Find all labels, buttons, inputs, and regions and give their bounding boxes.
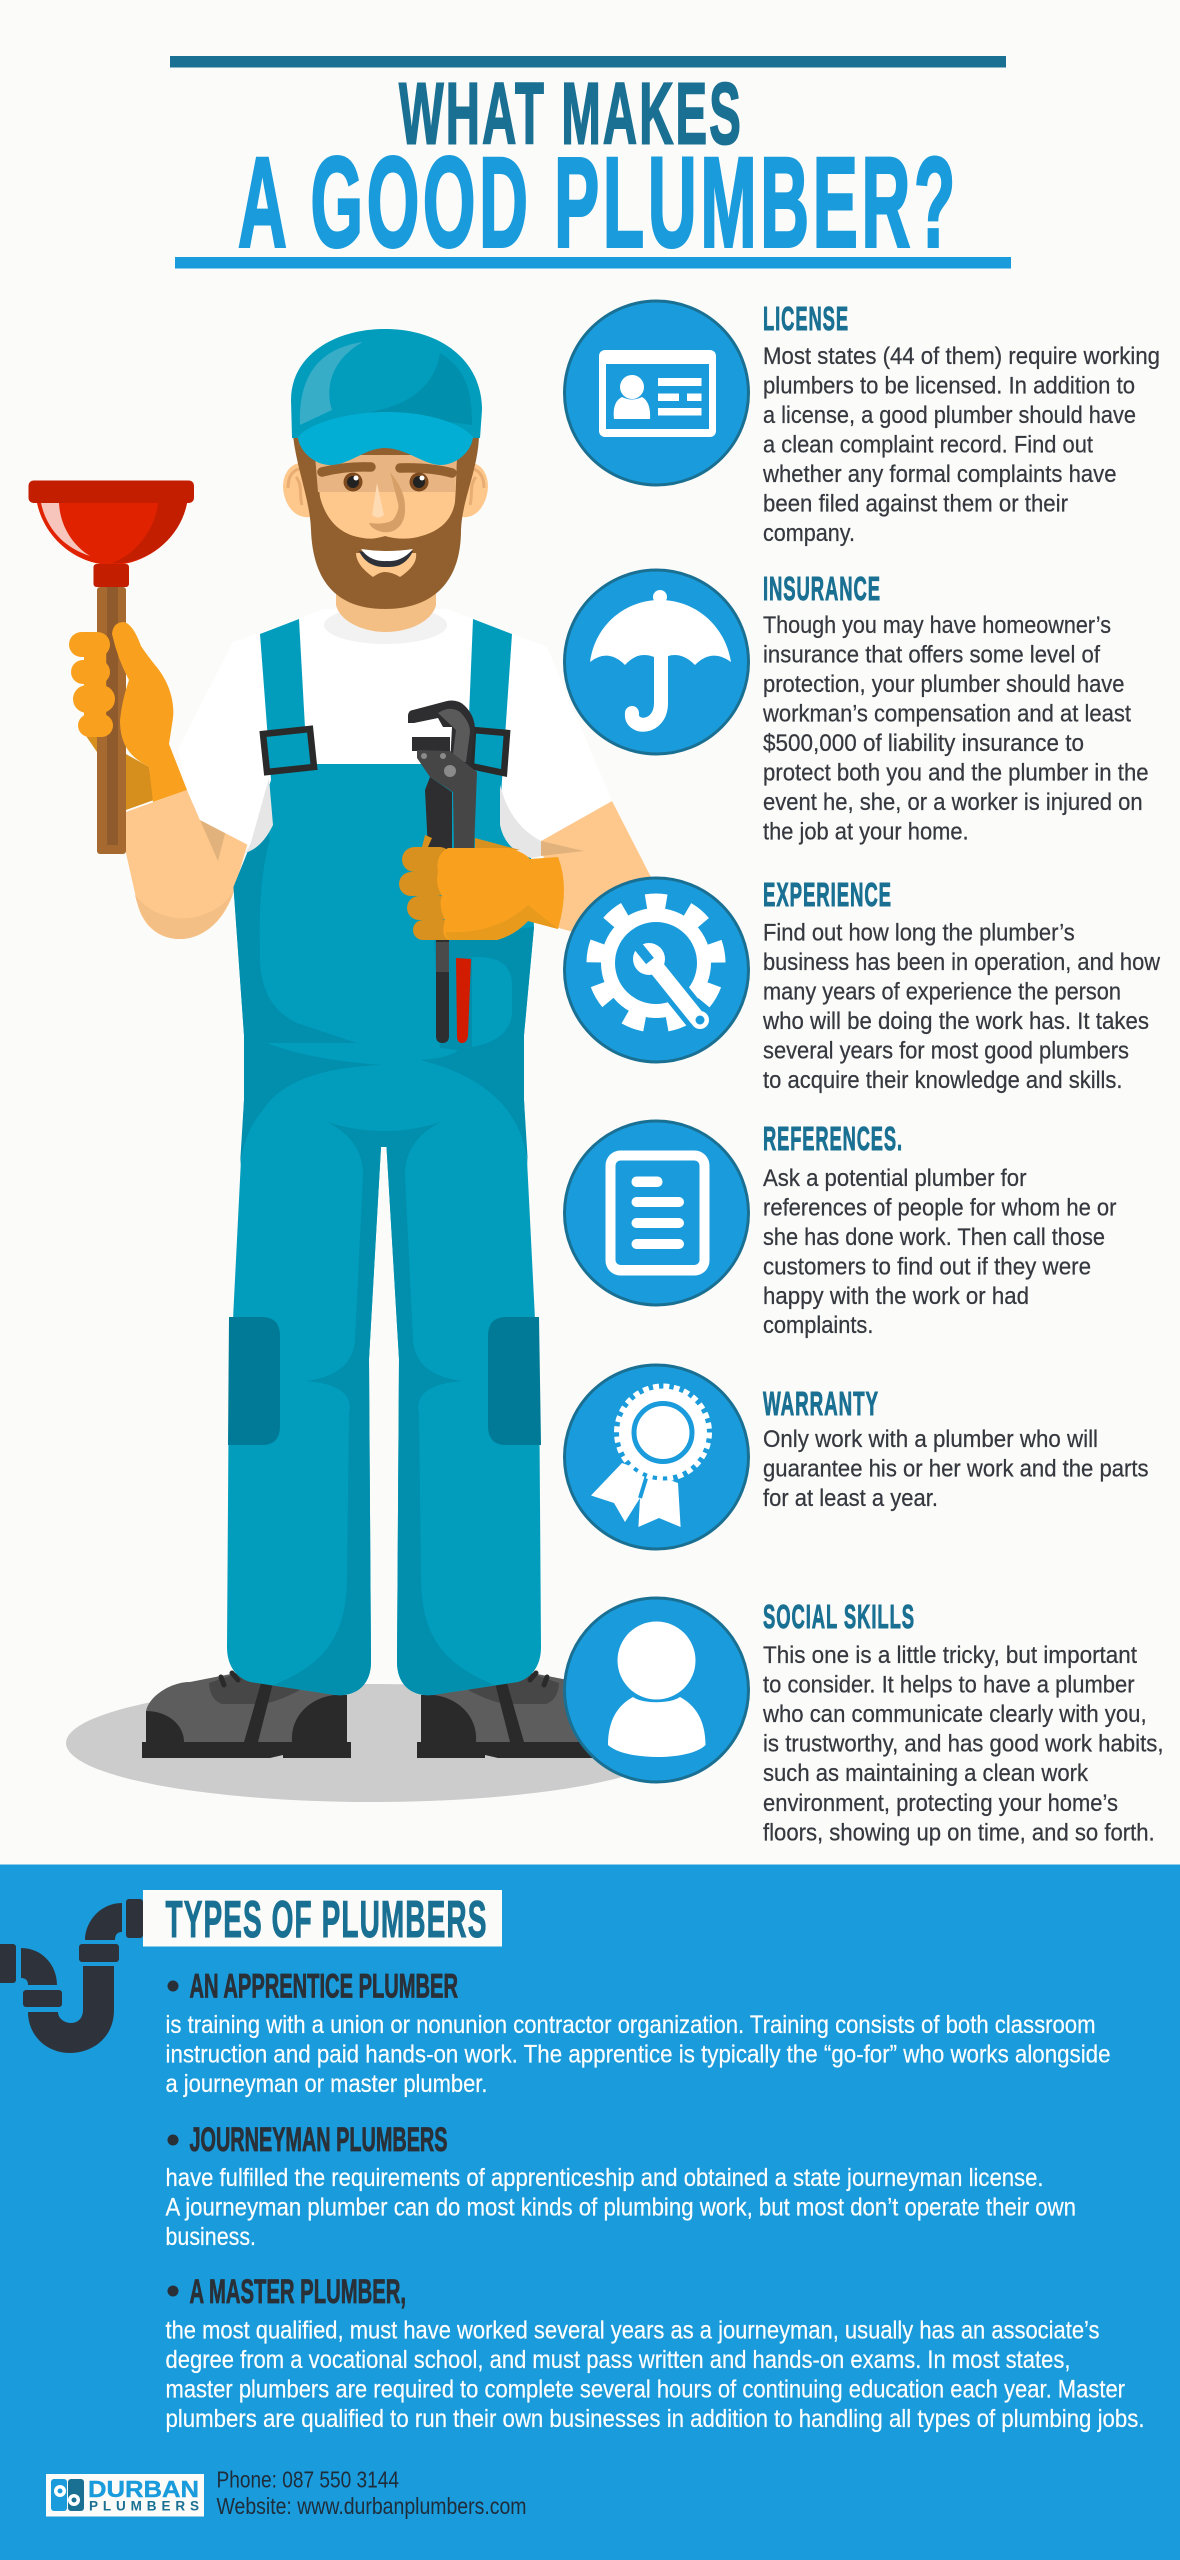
text: insurance: protection, your plumber should have bbox=[763, 671, 1124, 698]
overalls bbox=[227, 619, 541, 1695]
right glove bbox=[399, 835, 564, 940]
text: insurance: Though you may have homeowner’s bbox=[763, 612, 1111, 639]
logo: PLUMBERS bbox=[89, 2498, 199, 2514]
text: social skills: This one is a little tricky, but important bbox=[763, 1642, 1137, 1669]
ground shadow bbox=[66, 1684, 678, 1802]
section: apprentice plumber bbox=[166, 1968, 1110, 2098]
text: experience bbox=[762, 920, 1160, 1094]
text: insurance: the job at your home. bbox=[763, 818, 969, 846]
neck bbox=[336, 570, 436, 632]
section: master plumber: A MASTER PLUMBER, bbox=[190, 2273, 406, 2311]
strap buckles bbox=[263, 729, 507, 773]
text: insurance: insurance that offers some level of bbox=[763, 642, 1100, 668]
text: references bbox=[763, 1165, 1116, 1339]
text: references: complaints. bbox=[763, 1312, 873, 1339]
heading: insurance: INSURANCE bbox=[763, 571, 881, 608]
text: experience: many years of experience the person bbox=[763, 978, 1121, 1006]
plunger bbox=[28, 480, 194, 854]
icon circle: warranty bbox=[564, 1365, 748, 1549]
section: apprentice plumber: AN APPRENTICE PLUMBER bbox=[190, 1968, 458, 2006]
text: insurance: workman’s compensation and at least bbox=[762, 700, 1131, 728]
text: license: plumbers to be licensed. In addition to bbox=[763, 372, 1135, 400]
text: experience: who will be doing the work has. It takes bbox=[762, 1008, 1149, 1035]
text: license bbox=[762, 343, 1160, 547]
text: references: references of people for whom he or bbox=[763, 1194, 1116, 1222]
section: journeyman plumbers bbox=[166, 2121, 1076, 2251]
text: references: Ask a potential plumber for bbox=[763, 1165, 1026, 1192]
heading: experience: EXPERIENCE bbox=[763, 877, 892, 914]
icon circle: license bbox=[564, 301, 748, 485]
logo: DURBAN bbox=[88, 2476, 199, 2502]
text: social skills: who can communicate clearly with you, bbox=[762, 1701, 1147, 1728]
heading: social skills: SOCIAL SKILLS bbox=[763, 1599, 915, 1636]
heading: license: LICENSE bbox=[763, 301, 849, 338]
text: warranty: Only work with a plumber who will bbox=[763, 1426, 1098, 1453]
cap bbox=[291, 329, 482, 465]
icon: pipe bbox=[0, 1899, 143, 2053]
left shoe bbox=[142, 1672, 351, 1758]
right shoe bbox=[417, 1672, 626, 1758]
text: warranty bbox=[763, 1426, 1149, 1512]
text: license: whether any formal complaints have bbox=[762, 461, 1116, 488]
text: license: a license, a good plumber should have bbox=[763, 402, 1136, 429]
collar bbox=[324, 606, 447, 644]
text: warranty: guarantee his or her work and the parts bbox=[763, 1456, 1149, 1482]
title: WHAT MAKES bbox=[399, 66, 743, 162]
text: experience: several years for most good plumbers bbox=[763, 1038, 1129, 1064]
text: license: company. bbox=[763, 520, 855, 547]
logo bbox=[46, 2474, 204, 2516]
ears bbox=[283, 463, 488, 517]
text: warranty: for at least a year. bbox=[763, 1485, 938, 1512]
section: journeyman plumbers: business. bbox=[166, 2223, 256, 2251]
left glove bbox=[69, 622, 187, 810]
sleeve shadows bbox=[245, 778, 541, 858]
pipe wrench bbox=[408, 701, 477, 1043]
text: social skills: such as maintaining a clean work bbox=[763, 1760, 1089, 1787]
t-shirt bbox=[178, 609, 612, 858]
text: license: a clean complaint record. Find out bbox=[763, 432, 1093, 458]
text: references: she has done work. Then call those bbox=[763, 1224, 1105, 1251]
text: insurance: event he, she, or a worker is injured on bbox=[763, 789, 1143, 816]
text: insurance bbox=[762, 612, 1149, 846]
mouth bbox=[356, 549, 416, 577]
section: apprentice plumber: a journeyman or master plumber. bbox=[166, 2070, 488, 2098]
face bbox=[315, 455, 457, 539]
heading: types of plumbers bbox=[143, 1890, 502, 1949]
panel: types of plumbers bbox=[0, 1864, 1180, 2560]
icon circle: social skills bbox=[564, 1598, 748, 1782]
icon circle: experience bbox=[564, 878, 748, 1062]
contact details bbox=[216, 2466, 526, 2519]
section: master plumber: degree from a vocational school, and must pass written and hands-on exams. In most states, bbox=[166, 2346, 1070, 2374]
contact details: Website: www.durbanplumbers.com bbox=[216, 2493, 526, 2519]
illustration: plumber bbox=[28, 329, 678, 1802]
right arm bbox=[541, 801, 655, 950]
title bbox=[170, 56, 1011, 274]
heading: references: REFERENCES. bbox=[763, 1121, 903, 1158]
text: social skills bbox=[762, 1642, 1164, 1846]
icon circle: insurance bbox=[564, 570, 748, 754]
section: journeyman plumbers: JOURNEYMAN PLUMBERS bbox=[190, 2121, 448, 2159]
heading: warranty: WARRANTY bbox=[763, 1386, 879, 1423]
text: references: customers to find out if they were bbox=[763, 1254, 1091, 1280]
text: social skills: to consider. It helps to have a plumber bbox=[763, 1672, 1135, 1698]
section: journeyman plumbers: A journeyman plumber can do most kinds of plumbing work, but most don’t operate their own bbox=[166, 2194, 1076, 2222]
heading: types of plumbers: TYPES OF PLUMBERS bbox=[166, 1891, 488, 1949]
text: experience: to acquire their knowledge and skills. bbox=[763, 1067, 1122, 1094]
text: references: happy with the work or had bbox=[763, 1283, 1029, 1310]
text: social skills: environment, protecting your home’s bbox=[763, 1790, 1118, 1817]
text: insurance: $500,000 of liability insurance to bbox=[763, 730, 1084, 757]
section: master plumber bbox=[166, 2273, 1144, 2433]
beard bbox=[293, 436, 479, 609]
text: insurance: protect both you and the plumber in the bbox=[763, 760, 1149, 786]
left arm bbox=[126, 790, 248, 939]
section: journeyman plumbers: have fulfilled the requirements of apprenticeship and obtained a state journeyman license. bbox=[166, 2164, 1044, 2192]
icon circle: references bbox=[564, 1121, 748, 1305]
contact details: Phone: 087 550 3144 bbox=[216, 2466, 399, 2492]
text: license: been filed against them or their bbox=[763, 490, 1068, 518]
text: experience: Find out how long the plumber’s bbox=[763, 920, 1075, 946]
